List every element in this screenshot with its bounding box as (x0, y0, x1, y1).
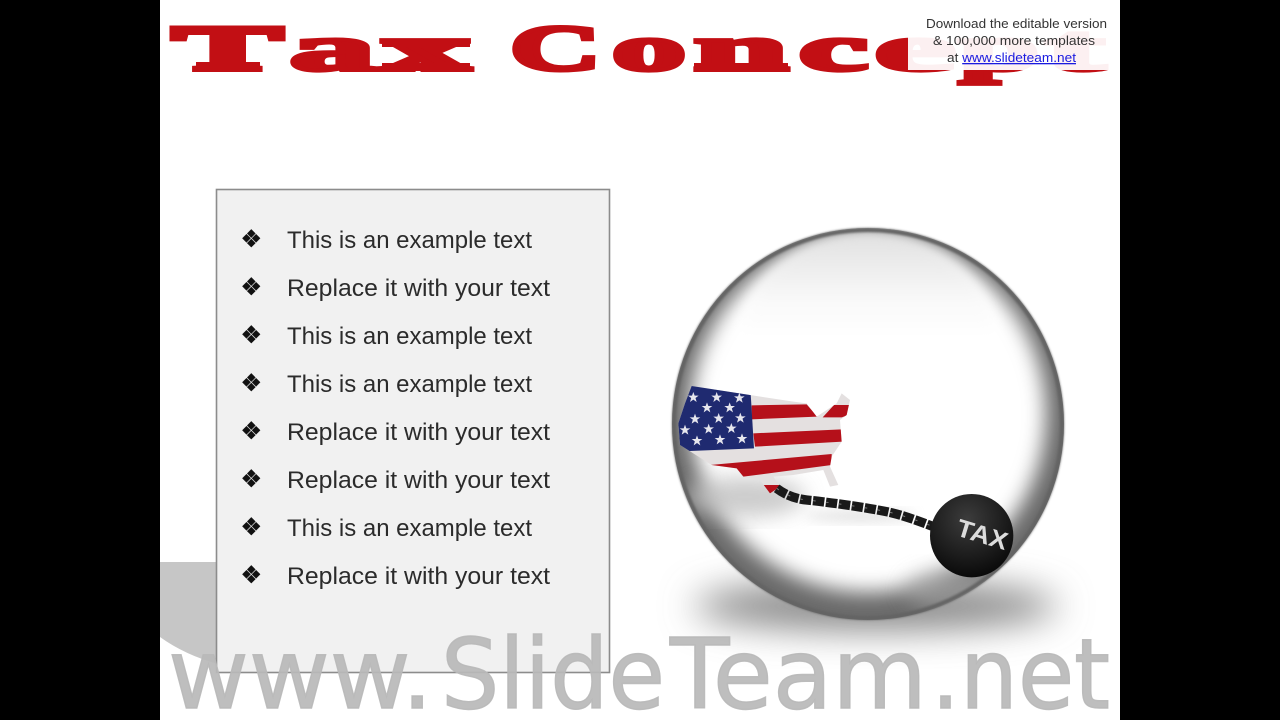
rim (674, 230, 1062, 618)
download notice (908, 10, 1113, 70)
bullet list: ❖ (240, 225, 262, 253)
wrecking ball (930, 494, 1013, 577)
title: T (172, 13, 283, 85)
title: e (875, 13, 955, 85)
title: p (959, 13, 1039, 85)
floor shading (685, 477, 805, 517)
title: a (290, 13, 375, 85)
bullet list: ❖ (240, 417, 262, 445)
bullet list: This is an example text (287, 515, 532, 542)
bullet list: This is an example text (287, 371, 532, 398)
grey corner shape (160, 562, 218, 664)
sphere shadow (694, 582, 1058, 630)
top highlight (757, 228, 979, 294)
bullet list: ❖ (240, 513, 262, 541)
title: x (382, 13, 471, 85)
download notice: Download the editable version (926, 16, 1107, 31)
bullet list: Replace it with your text (287, 467, 550, 494)
chain (777, 488, 933, 527)
title (172, 13, 1105, 85)
download notice: & 100,000 more templates (933, 33, 1096, 48)
US flag map (673, 383, 1013, 577)
inner glow (690, 236, 1046, 592)
title: C (510, 13, 601, 85)
text panel (216, 190, 610, 672)
right letterbox (1120, 0, 1280, 720)
bullet list: ❖ (240, 369, 262, 397)
bullet list: This is an example text (287, 227, 532, 254)
bullet list (240, 225, 550, 590)
bullet list: ❖ (240, 321, 262, 349)
title: t (1046, 13, 1105, 85)
wrecking ball: TAX (953, 515, 1011, 556)
bullet list: This is an example text (287, 323, 532, 350)
download notice: at www.slideteam.net (947, 50, 1076, 65)
bullet list: ❖ (240, 465, 262, 493)
title: c (799, 13, 868, 85)
bullet list: ❖ (240, 561, 262, 589)
watermark (168, 618, 1110, 720)
bullet list: Replace it with your text (287, 563, 550, 590)
bullet list: ❖ (240, 273, 262, 301)
left letterbox (0, 0, 160, 720)
bullet list: Replace it with your text (287, 419, 550, 446)
glass sphere illustration (672, 228, 1064, 620)
title: o (612, 13, 686, 85)
bullet list: Replace it with your text (287, 275, 550, 302)
title: n (694, 13, 788, 85)
slide background (160, 0, 1120, 720)
